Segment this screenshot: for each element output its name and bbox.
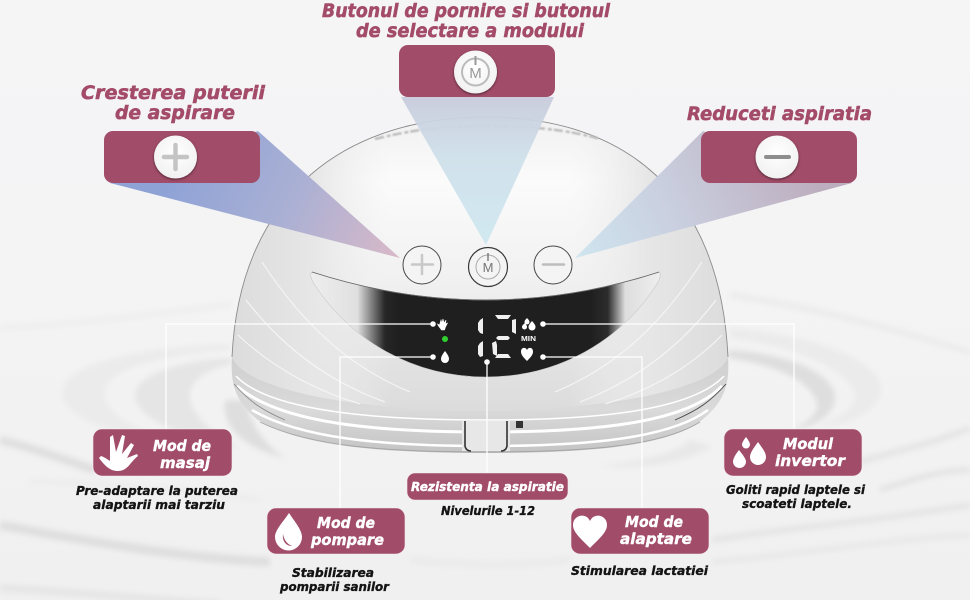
- icon: drops: [733, 437, 766, 468]
- description: masaj: [76, 484, 238, 512]
- callout: power button: M: [469, 65, 482, 82]
- light beam: plus: [110, 131, 400, 258]
- heading: cresterea puterii de aspirare: de aspirare: [115, 102, 235, 124]
- label: [153, 437, 211, 472]
- status LED: [442, 336, 448, 342]
- display screen: [311, 272, 660, 377]
- description: nivelurile: Nivelurile 1-12: [441, 504, 535, 518]
- heading: cresterea puterii de aspirare: Cresterea puterii: [81, 82, 265, 104]
- icon: heart: [573, 516, 607, 548]
- button: power M: M: [483, 260, 493, 275]
- panel: rezistenta la aspiratie: Rezistenta la aspiratie: [411, 480, 564, 494]
- label: [310, 514, 384, 549]
- icon: hand small: [438, 319, 448, 330]
- light beam: minus: [575, 131, 852, 258]
- button: power M: [468, 248, 508, 286]
- label: masaj: [160, 454, 211, 472]
- light beam: power: [401, 97, 554, 245]
- clip latch: [462, 421, 523, 451]
- label: [620, 513, 692, 548]
- label: Modul: [783, 435, 834, 453]
- button: minus: [534, 246, 572, 284]
- panel: mod de alaptare: [571, 508, 709, 554]
- description: pompare: pomparii sanilor: [279, 580, 390, 594]
- description: pompare: [279, 566, 390, 594]
- heading: butonul de pornire: [322, 0, 610, 42]
- description: invertor: [726, 483, 866, 511]
- icon: drops small: [522, 318, 536, 330]
- panel: mod de pompare: [267, 508, 405, 554]
- drop highlight: [283, 534, 292, 546]
- icon: heart small: [521, 348, 533, 361]
- label: pompare: [310, 531, 384, 549]
- panel: mod de masaj: [93, 429, 232, 476]
- digits 12: [478, 315, 516, 358]
- heading: reduceti aspiratia: Reduceti aspiratia: [687, 103, 872, 125]
- icon: drop small: [441, 351, 449, 363]
- panel: rezistenta la aspiratie: [407, 473, 568, 500]
- product: breast pump body: [232, 117, 728, 453]
- label: [775, 435, 847, 470]
- callout: plus button: [104, 131, 260, 183]
- connector lines: [166, 321, 794, 508]
- description: masaj: Pre-adaptare la puterea: [76, 484, 238, 498]
- description: alaptare: Stimularea lactatiei: [571, 564, 709, 578]
- label: Mod de: [625, 513, 683, 531]
- label: invertor: [775, 452, 847, 470]
- heading: butonul de pornire: Butonul de pornire si butonul: [322, 0, 610, 22]
- icon: drop: [275, 513, 302, 550]
- button: plus: [403, 246, 441, 284]
- MIN label: MIN: [521, 336, 536, 343]
- description: invertor: Goliti rapid laptele si: [726, 483, 866, 497]
- callout: minus button: [701, 131, 857, 183]
- heading: butonul de pornire: de selectare a modului: [356, 20, 584, 42]
- buttons on device: [403, 246, 572, 286]
- label: Mod de: [317, 514, 375, 532]
- description: invertor: scoateti laptele.: [742, 497, 852, 511]
- callout: power button: [399, 45, 555, 97]
- label: Mod de: [153, 437, 211, 455]
- icon: hand: [99, 435, 138, 471]
- description: pompare: Stabilizarea: [292, 566, 374, 580]
- description: masaj: alaptarii mai tarziu: [93, 498, 225, 512]
- panel: modul invertor: [724, 429, 862, 476]
- label: alaptare: [620, 530, 692, 548]
- heading: cresterea puterii de aspirare: [81, 82, 265, 124]
